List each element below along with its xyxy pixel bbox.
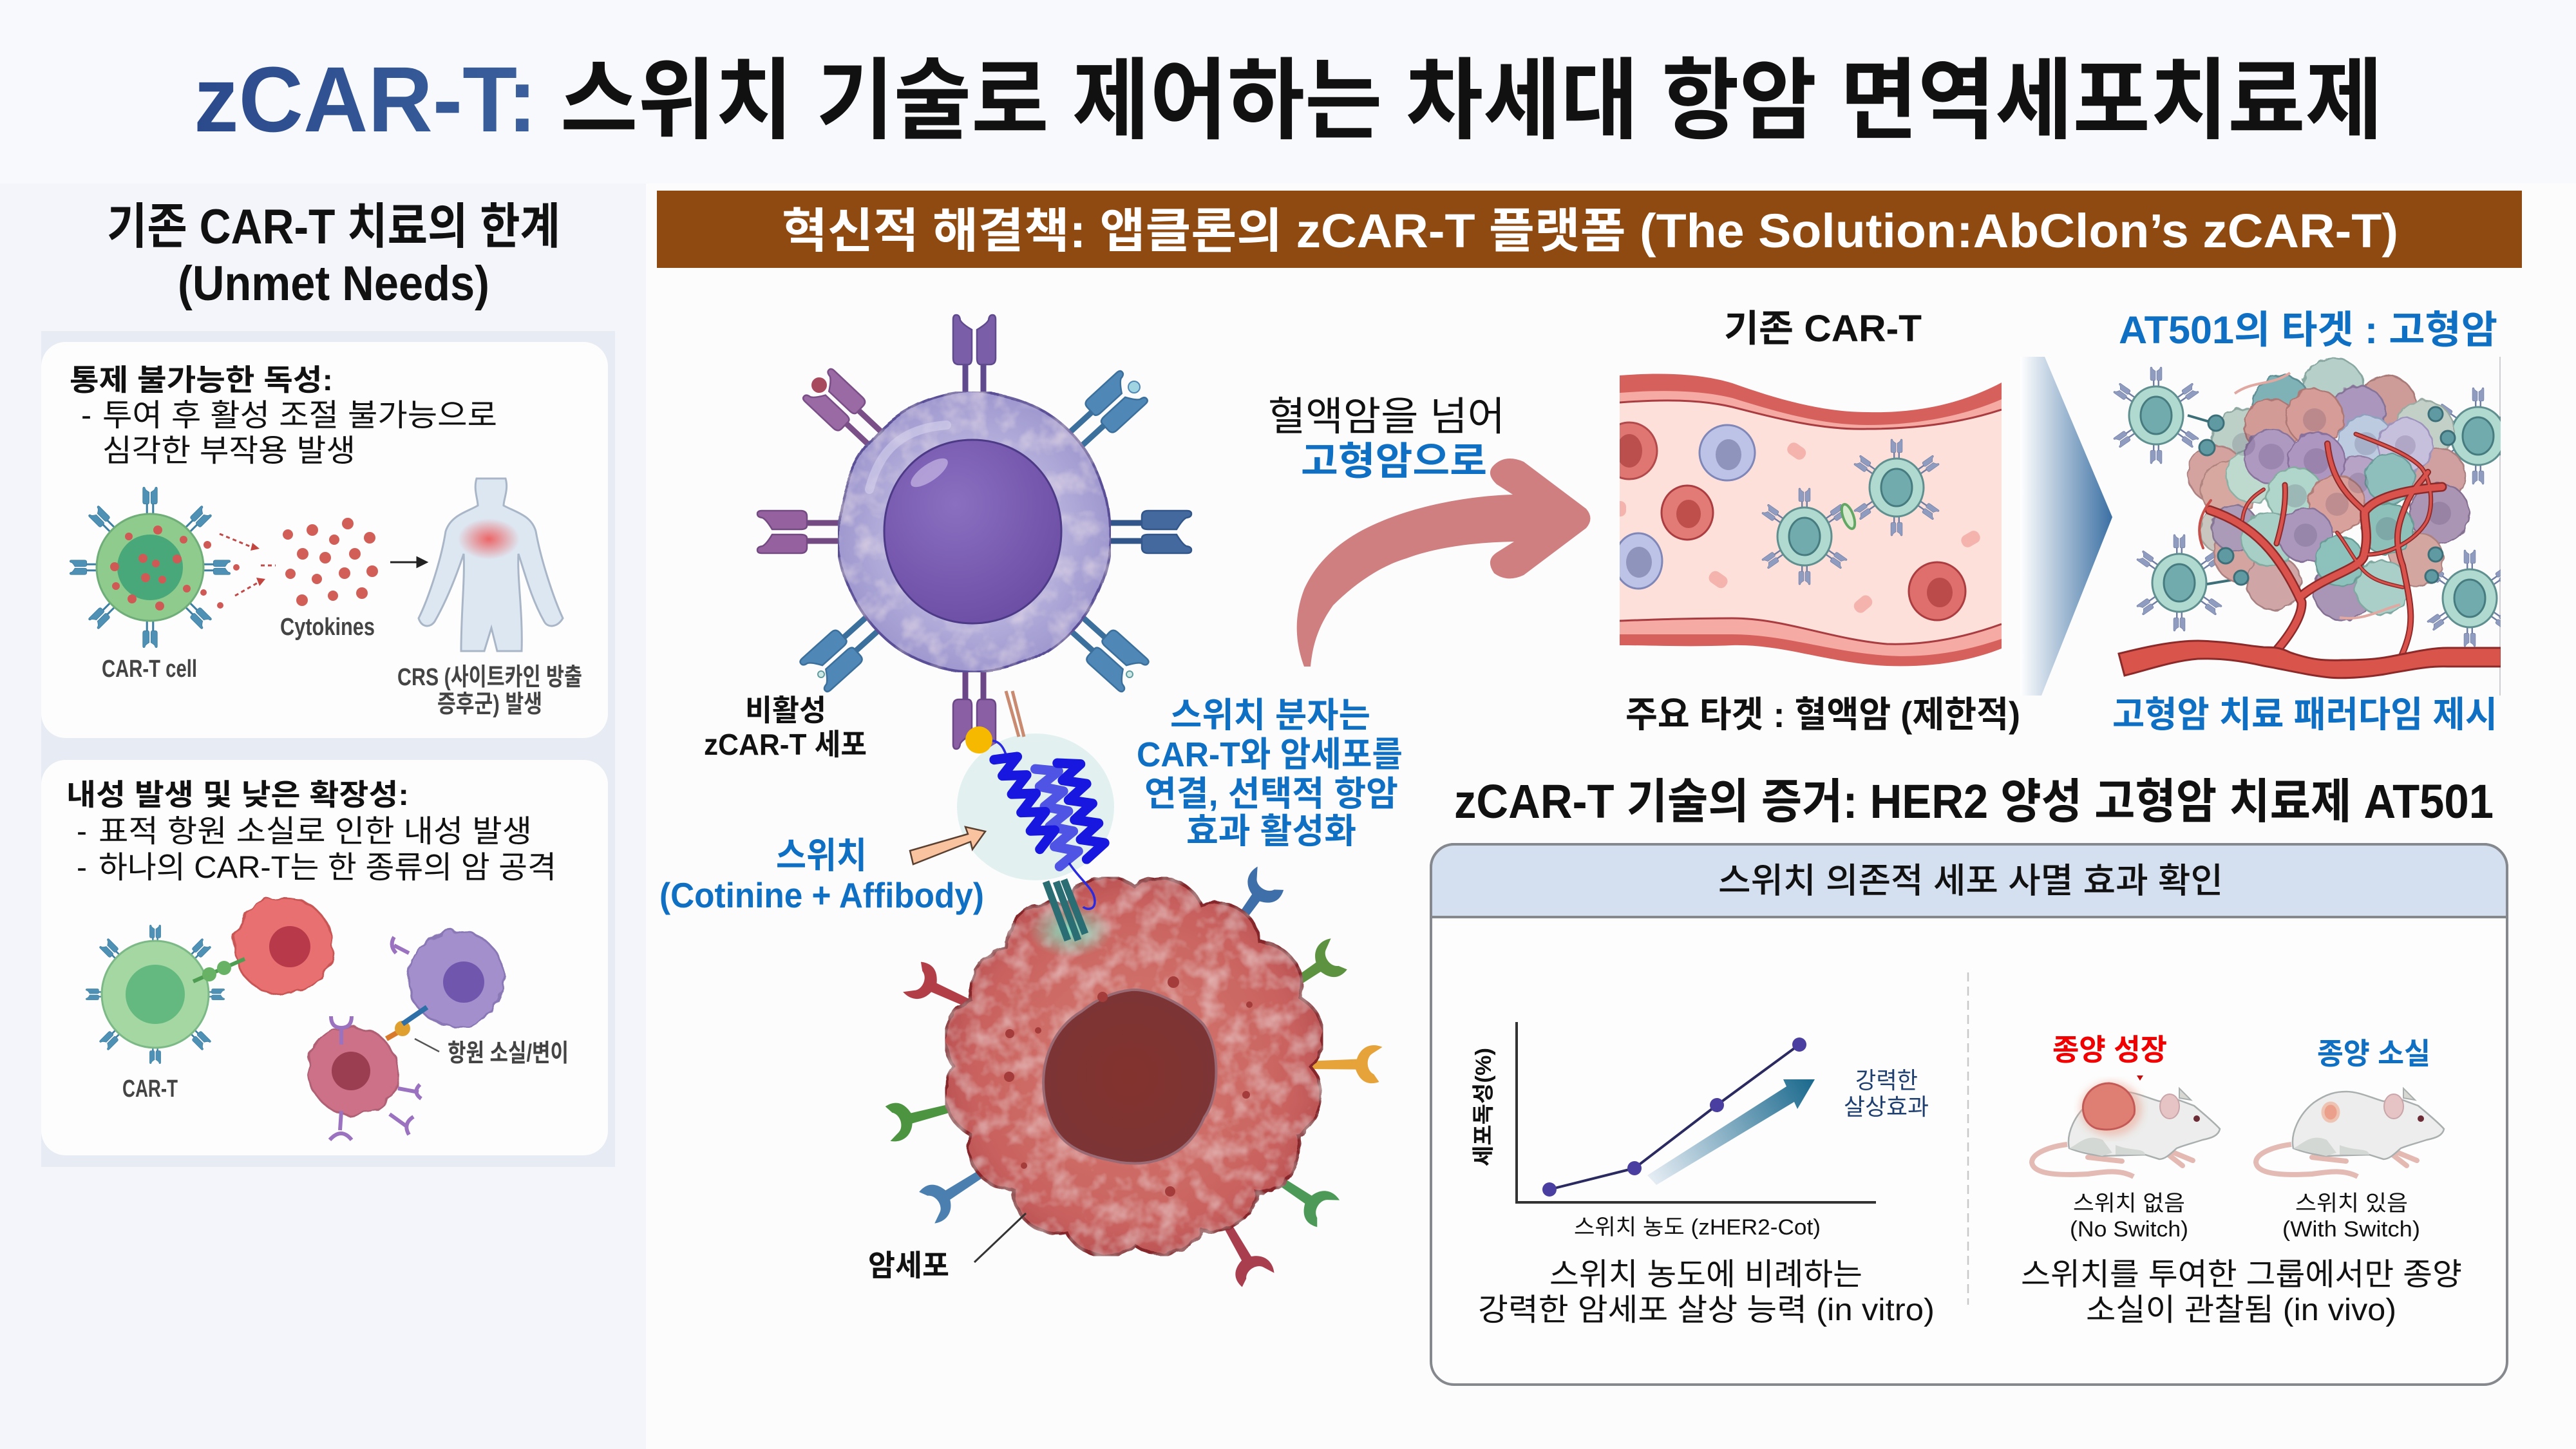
resistance text: 표적 항원 소실로 인한 내성 발생 bbox=[99, 815, 532, 849]
label: with switch bbox=[2282, 1191, 2420, 1242]
banner: the solution bbox=[657, 191, 2522, 268]
label: tumour cell bbox=[868, 1213, 1026, 1282]
arrow: points to switch bbox=[910, 827, 985, 864]
label: inactive cell bbox=[704, 694, 867, 761]
tumour blood vessels bbox=[2199, 434, 2442, 654]
illustration: inactive zCAR-T cell bbox=[757, 315, 1191, 749]
card: uncontrolled toxicity bbox=[41, 342, 608, 738]
wisps bbox=[2235, 373, 2400, 618]
label: switch: (Cotinine + Affibody) bbox=[659, 875, 984, 915]
illustration: solid tumour bbox=[2113, 357, 2521, 696]
arrow: rising trend bbox=[1647, 1079, 1815, 1185]
icon: human body with chest inflammation bbox=[419, 478, 563, 651]
red and blue cells bbox=[1602, 422, 1965, 620]
chart: cytotoxicity by switch concentration: 강력한 bbox=[1855, 1067, 1918, 1094]
caption: in vivo bbox=[2021, 1258, 2462, 1327]
red blood cells bbox=[1613, 440, 1982, 615]
left heading: 기존 CAR-T 치료의 한계 bbox=[107, 200, 560, 254]
tumour mass cells bbox=[2188, 358, 2469, 620]
label: no switch: 스위치 없음 bbox=[2073, 1191, 2185, 1216]
toxicity text: 심각한 부작용 발생 bbox=[102, 434, 355, 468]
left heading: (Unmet Needs) bbox=[178, 256, 489, 311]
caption: in vitro bbox=[1478, 1258, 1935, 1327]
icon: CAR-T cell releasing cytokines bbox=[70, 487, 378, 648]
illustration: tumour cell bbox=[881, 866, 1383, 1291]
resistance text: 하나의 CAR-T는 한 종류의 암 공격 bbox=[99, 851, 556, 885]
text: switch molecule description: 연결, 선택적 항암 bbox=[1144, 775, 1398, 813]
toxicity text: - bbox=[81, 399, 91, 433]
arrow: curved pink bbox=[1297, 459, 1591, 667]
stalks binding tumour bbox=[2199, 407, 2455, 585]
text: beyond blood cancer bbox=[1268, 395, 1505, 483]
text: switch molecule description: 스위치 분자는 bbox=[1170, 696, 1370, 735]
label: CAR-T cell: CAR-T cell bbox=[102, 656, 197, 683]
heading: conventional CAR-T: 기존 CAR-T bbox=[1724, 308, 1922, 350]
resistance text: - bbox=[77, 851, 87, 885]
panel header: 스위치 의존적 세포 사멸 효과 확인 bbox=[1718, 862, 2223, 900]
toxicity text: 투여 후 활성 조절 불가능으로 bbox=[102, 399, 497, 433]
resistance text bbox=[66, 778, 556, 885]
chart: cytotoxicity by switch concentration: 살상효과 bbox=[1844, 1094, 1929, 1120]
label: CRS bbox=[397, 664, 582, 718]
caption: solid tumour paradigm: 고형암 치료 패러다임 제시 bbox=[2112, 694, 2497, 735]
caption: in vitro: 스위치 농도에 비례하는 bbox=[1549, 1258, 1862, 1292]
illustration: blood vessel bbox=[1602, 374, 2002, 666]
callout: antigen loss: 항원 소실/변이 bbox=[448, 1040, 569, 1067]
label: tumour loss: 종양 소실 bbox=[2317, 1037, 2430, 1070]
label: CRS: CRS (사이트카인 방출 bbox=[397, 664, 582, 691]
banner: the solution: 혁신적 해결책: 앱클론의 zCAR-T 플랫폼 (The Solution:AbClon’s zCAR-T) bbox=[782, 204, 2398, 258]
callout: antigen loss bbox=[415, 1039, 569, 1067]
chart: cytotoxicity by switch concentration bbox=[1472, 1022, 1929, 1240]
icon: antigen-lost tumour cells bbox=[309, 931, 504, 1140]
card: resistance and low scalability bbox=[41, 760, 608, 1155]
toxicity text bbox=[70, 363, 497, 468]
label: no switch bbox=[2070, 1191, 2188, 1242]
label: switch: 스위치 bbox=[776, 835, 867, 876]
label: CRS: 증후군) 발생 bbox=[437, 691, 542, 718]
text: switch molecule description: 효과 활성화 bbox=[1186, 812, 1356, 851]
main blood vessel bbox=[2119, 641, 2501, 678]
toxicity text: 통제 불가능한 독성: bbox=[70, 363, 333, 397]
arrow: chevron transition bbox=[2020, 357, 2112, 696]
left heading bbox=[107, 200, 560, 311]
icon: mouse with tumour gone bbox=[2256, 1088, 2444, 1177]
icon: red tumour cell bbox=[193, 897, 332, 995]
caption: in vivo: 소실이 관찰됨 (in vivo) bbox=[2086, 1293, 2396, 1327]
heading: AT501 target: AT501의 타겟 : 고형암 bbox=[2119, 308, 2497, 352]
icon: green CAR-T cell bbox=[86, 925, 225, 1064]
panel: evidence bbox=[1431, 844, 2507, 1385]
T cells around tumour bbox=[2113, 367, 2521, 647]
caption: main target: 주요 타겟 : 혈액암 (제한적) bbox=[1625, 694, 2020, 735]
text: beyond blood cancer: 고형암으로 bbox=[1301, 440, 1487, 483]
heading: evidence: zCAR-T 기술의 증거: HER2 양성 고형암 치료제 AT501 bbox=[1454, 775, 2494, 828]
caption: in vitro: 강력한 암세포 살상 능력 (in vitro) bbox=[1478, 1293, 1935, 1327]
label: inactive cell: 비활성 bbox=[745, 694, 826, 727]
label: no switch: (No Switch) bbox=[2070, 1217, 2188, 1242]
title: 스위치 기술로 제어하는 차세대 항암 면역세포치료제 bbox=[560, 52, 2383, 151]
icon: mouse with tumour bbox=[2032, 1075, 2220, 1177]
arrow: cytokines to body bbox=[390, 558, 426, 567]
T cells in vessel bbox=[1761, 439, 1940, 585]
text: beyond blood cancer: 혈액암을 넘어 bbox=[1268, 395, 1505, 439]
chart: cytotoxicity by switch concentration: 스위치 농도 (zHER2-Cot) bbox=[1574, 1215, 1821, 1240]
resistance text: 내성 발생 및 낮은 확장성: bbox=[66, 778, 409, 811]
label: cytokines: Cytokines bbox=[280, 614, 375, 641]
chart: cytotoxicity by switch concentration: 세포독성(%) bbox=[1472, 1048, 1496, 1166]
label: CAR-T: CAR-T bbox=[122, 1075, 178, 1103]
panel: unmet needs bbox=[41, 200, 615, 1167]
label: inactive cell: zCAR-T 세포 bbox=[704, 728, 867, 761]
label: with switch: (With Switch) bbox=[2282, 1217, 2420, 1242]
label: tumour growth: 종양 성장 bbox=[2052, 1033, 2167, 1066]
illustration: switch molecule bbox=[957, 691, 1114, 958]
text: switch molecule description: CAR-T와 암세포를 bbox=[1137, 735, 1403, 774]
text: switch molecule description bbox=[1137, 696, 1403, 851]
label: with switch: 스위치 있음 bbox=[2295, 1191, 2408, 1216]
caption: in vivo: 스위치를 투여한 그룹에서만 종양 bbox=[2021, 1258, 2462, 1292]
label: switch bbox=[659, 835, 984, 915]
panel header bbox=[1431, 844, 2507, 917]
resistance text: - bbox=[77, 815, 87, 849]
label: tumour cell: 암세포 bbox=[868, 1249, 949, 1282]
title: zCAR-T: bbox=[194, 48, 537, 151]
